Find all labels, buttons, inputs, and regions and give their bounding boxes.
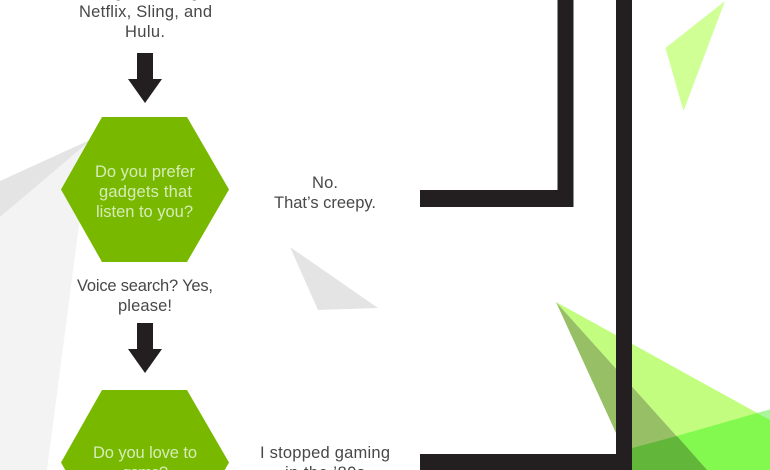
hexagon: gaming question [61, 390, 229, 470]
text: stopped gaming answer: I stopped gaming [260, 444, 390, 462]
text: streaming answer [79, 0, 212, 41]
decorative green shards bottom right [556, 302, 770, 470]
text: voice search answer: please! [118, 297, 172, 315]
connector: long vertical with gaming branch [420, 0, 632, 470]
text: no answer: That’s creepy. [274, 194, 376, 212]
hexagon: gadgets question: Do you prefer [95, 163, 196, 181]
arrow: down to gadgets question [128, 53, 162, 103]
hexagon: gadgets question: gadgets that [99, 183, 192, 201]
text: voice search answer [77, 277, 213, 315]
hexagon: gadgets question: listen to you? [96, 203, 193, 221]
text: voice search answer: Voice search? Yes, [77, 277, 213, 295]
text: no answer: No. [312, 174, 338, 192]
connector: no branch elbow [420, 0, 574, 207]
text: stopped gaming answer [260, 444, 390, 470]
decorative grey shards left [0, 139, 92, 470]
hexagon: gaming question: Do you love to [93, 444, 197, 462]
arrow: down to gaming question [128, 323, 162, 373]
decorative light green triangle top right [666, 1, 725, 111]
text: streaming answer: Hulu. [125, 23, 165, 41]
hexagon: gadgets question [61, 117, 229, 262]
text: streaming answer: Netflix, Sling, and [79, 3, 212, 21]
decorative grey triangle [290, 247, 378, 310]
text: no answer [274, 174, 376, 212]
